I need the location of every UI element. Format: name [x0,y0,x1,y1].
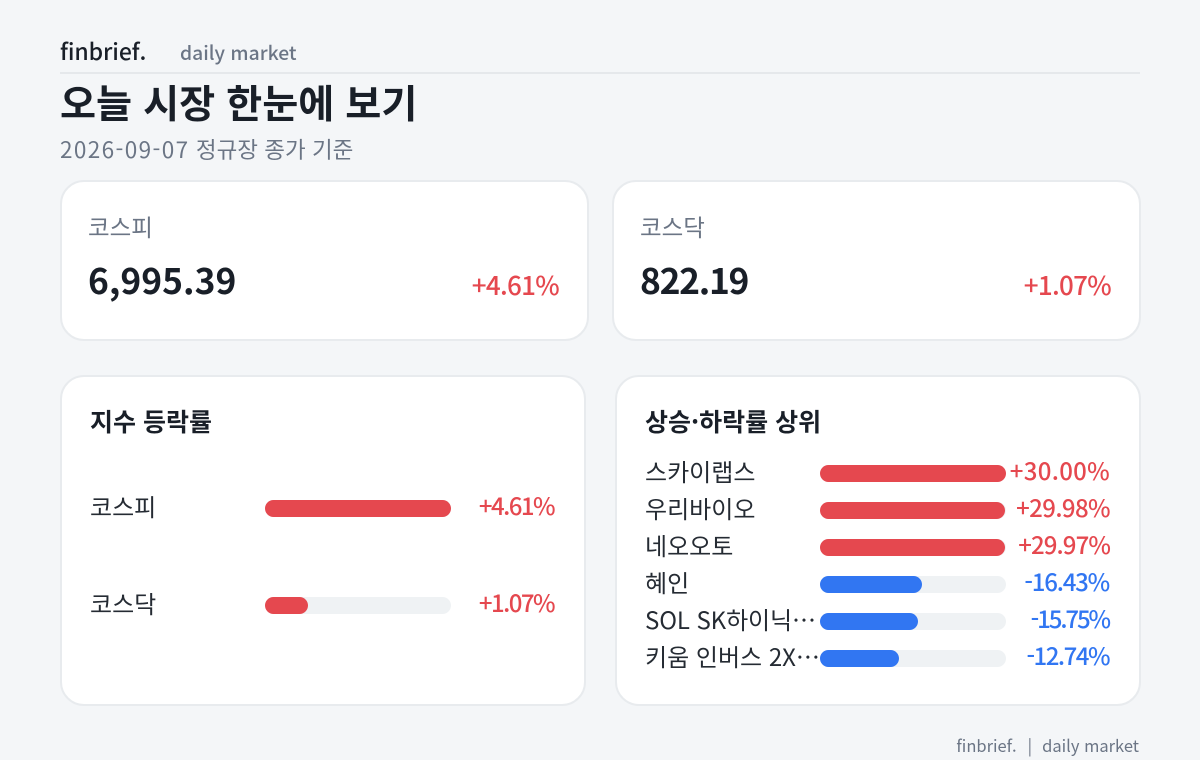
KOSDAQ change: +1.07% [1024,266,1111,303]
value: -12.74% [1026,637,1109,672]
header tagline: daily market [180,38,297,66]
label: 우리바이오 [645,490,755,525]
row: 스카이랩스 [645,452,1110,488]
label: 스카이랩스 [645,453,755,488]
KOSDAQ value: 822.19 [640,254,748,305]
list heading: 상승·하락률 상위 [645,403,821,439]
panel: index change chart [60,375,586,706]
KOSPI change: +4.61% [472,266,559,303]
chart heading: 지수 등락률 [90,403,212,439]
label: 키움 인버스 2X… [645,638,820,673]
KOSPI label: 코스피 [88,209,153,243]
value: +29.98% [1016,489,1110,524]
KOSDAQ label: 코스닥 [640,209,705,243]
label: 혜인 [645,564,689,599]
value: -15.75% [1031,600,1109,635]
subtitle: 2026-09-07 정규장 종가 기준 [60,133,353,165]
value: +1.07% [479,584,554,619]
panel: KOSPI summary [60,180,589,341]
row: 네오오토 [645,526,1110,562]
value: +4.61% [479,487,554,522]
header brand: finbrief. [60,33,146,67]
row: 우리바이오 [645,489,1110,525]
row: KOSDAQ [90,584,555,620]
row: SOL SK하이닉스 [645,600,1110,636]
title: 오늘 시장 한눈에 보기 [60,74,417,130]
label: 코스피 [90,488,156,523]
label: SOL SK하이닉… [645,601,816,636]
panel: KOSDAQ summary [612,180,1141,341]
bar [820,650,1006,667]
bar [820,465,1006,482]
label: 네오오토 [645,527,733,562]
bar [265,597,451,614]
panel: top gainers and losers [615,375,1141,706]
bar [820,502,1006,519]
value: -16.43% [1024,563,1109,598]
row: KOSPI [90,487,555,523]
row: 혜인 [645,563,1110,599]
footer: finbrief. | daily market [956,733,1139,757]
bar [265,500,451,517]
bar [820,576,1006,593]
value: +30.00% [1010,452,1110,487]
bar [820,539,1006,556]
row: 키움 인버스 2X [645,637,1110,673]
value: +29.97% [1018,526,1110,561]
bar [820,613,1006,630]
KOSPI value: 6,995.39 [88,254,236,305]
label: 코스닥 [90,585,156,620]
